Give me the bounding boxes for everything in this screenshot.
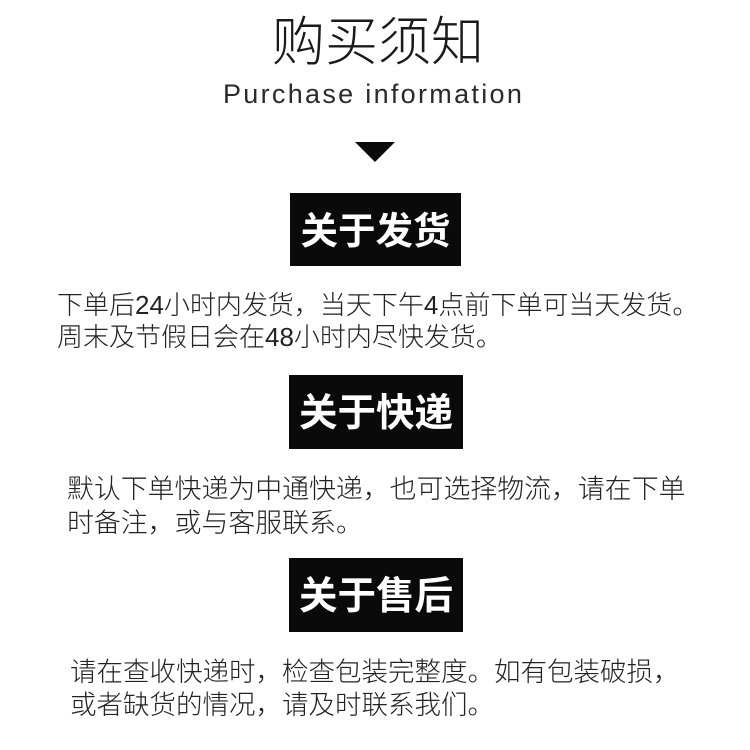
text block: shipping: [57, 290, 698, 352]
heading: after-sales: 关于售后: [299, 575, 453, 618]
text block: after-sales: [70, 657, 680, 720]
heading: after-sales: [289, 558, 463, 632]
text block: after-sales: 或者缺货的情况，请及时联系我们。: [70, 690, 494, 720]
heading: courier: 关于快递: [299, 392, 453, 435]
title: 购买须知: [272, 13, 484, 72]
text block: courier: [67, 474, 685, 538]
subtitle: Purchase information: [223, 79, 524, 109]
heading: courier: [289, 375, 463, 449]
icon: down arrow: [355, 142, 395, 162]
heading: shipping: 关于发货: [300, 210, 450, 252]
heading: shipping: [290, 193, 461, 266]
text block: courier: 默认下单快递为中通快递，也可选择物流，请在下单: [67, 474, 685, 504]
text block: shipping: 周末及节假日会在48小时内尽快发货。: [57, 322, 502, 352]
text block: shipping: 下单后24小时内发货，当天下午4点前下单可当天发货。: [57, 290, 698, 320]
text block: after-sales: 请在查收快递时，检查包装完整度。如有包装破损，: [70, 657, 680, 687]
text block: courier: 时备注，或与客服联系。: [67, 508, 363, 538]
